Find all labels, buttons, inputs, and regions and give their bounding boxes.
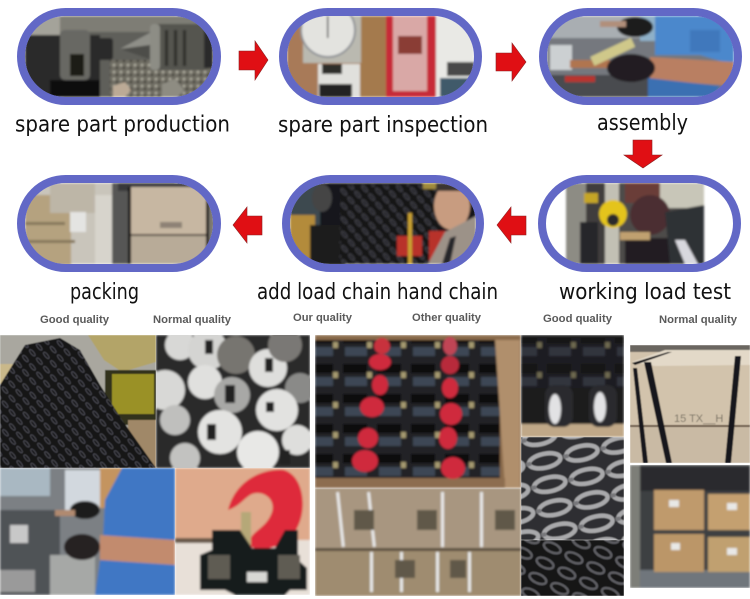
process step: assembly — [543, 12, 738, 136]
photo: worker assembling — [547, 16, 734, 97]
photo: hardness tester — [287, 16, 474, 97]
arrow right — [496, 43, 526, 81]
label: add load chain hand chain — [257, 280, 498, 305]
photo collage: hoists and chains — [315, 335, 624, 596]
photo: hoists hanging with chains — [290, 182, 476, 265]
arrow down — [624, 140, 662, 168]
caption: Good quality — [543, 313, 613, 325]
caption: Normal quality — [659, 314, 738, 326]
arrow right — [239, 41, 268, 80]
caption: Our quality — [293, 312, 353, 324]
photo: silver link chain — [521, 437, 624, 540]
caption row: quality comparison — [40, 312, 738, 326]
process step: working load test — [542, 179, 737, 305]
process step: add load chain hand chain — [257, 179, 498, 305]
photo: black link chain — [521, 540, 624, 596]
caption: Normal quality — [153, 314, 232, 326]
caption: Other quality — [412, 312, 482, 324]
photo: stacked cartons — [315, 488, 521, 596]
label: working load test — [559, 280, 731, 305]
photo: black hoists on pallet — [521, 335, 624, 437]
photo: lathe — [25, 16, 213, 97]
label: spare part production — [15, 112, 230, 138]
photo: worker on assembly line — [0, 468, 175, 595]
photo: strapped wooden crates: 15 TX__H — [674, 413, 723, 425]
photo collage: packaging and container — [630, 345, 750, 588]
process step: spare part inspection — [278, 3, 488, 138]
label: assembly — [597, 111, 688, 136]
arrow left — [497, 207, 526, 243]
label: spare part inspection — [278, 113, 488, 138]
photo: rows of black hoists with red hooks — [315, 335, 521, 488]
photo: gears — [156, 335, 310, 468]
process step: packing — [21, 179, 217, 305]
photo: strapped wooden crates — [630, 345, 750, 463]
photo: load test of lever hoist — [566, 183, 704, 264]
photo: black chain pile — [0, 335, 156, 468]
photo: packed cartons and crates — [25, 183, 215, 265]
photo collage: components — [0, 328, 315, 595]
photo: red hook on black hoist — [175, 468, 310, 595]
photo: container loaded with pallets — [630, 465, 750, 588]
caption: Good quality — [40, 314, 110, 326]
arrow left — [233, 207, 262, 243]
label: packing — [70, 280, 139, 305]
process step: spare part production — [15, 12, 230, 138]
